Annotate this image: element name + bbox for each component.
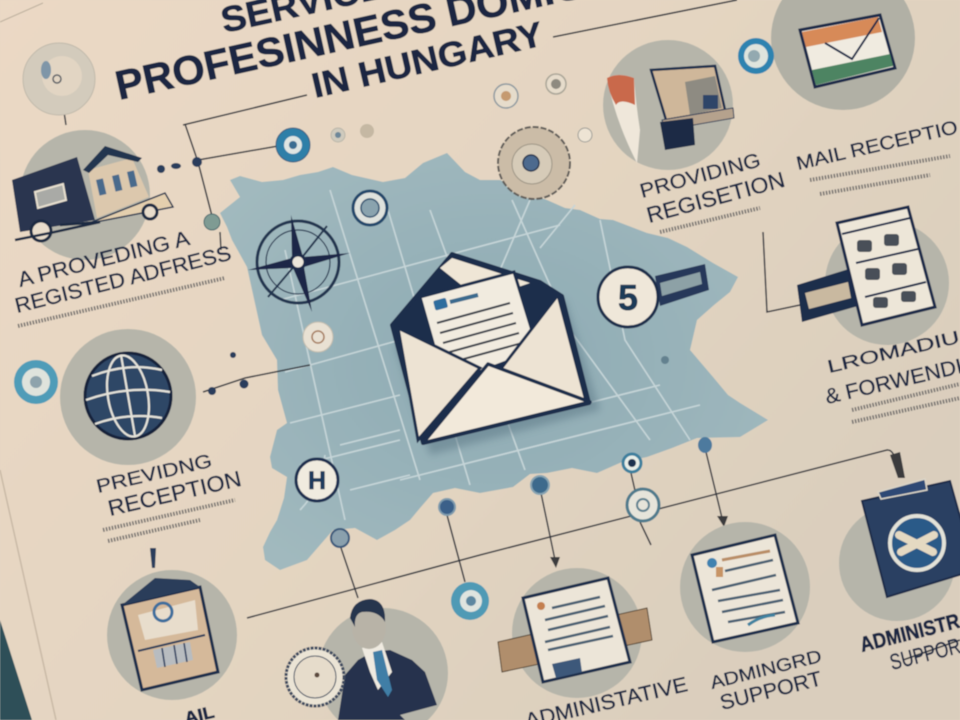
icon: globe <box>60 329 196 465</box>
badge: blue top <box>276 128 310 162</box>
icon: flag envelope <box>771 0 915 110</box>
small dots above map <box>331 74 592 142</box>
label: administrative support centre: ADMINGRD <box>708 646 824 693</box>
head <box>352 607 386 649</box>
badge: teal left <box>14 360 58 404</box>
page edge and dark corner <box>0 3 56 720</box>
tablet <box>837 207 935 325</box>
red pin <box>607 75 640 163</box>
label: providing reception: PREVIDNG <box>94 451 214 498</box>
envelope shadow <box>395 300 600 455</box>
icon: pin and registration box <box>603 40 734 170</box>
badge: letter H: H <box>308 467 326 495</box>
title: IN HUNGARY <box>308 15 547 106</box>
suit <box>338 650 437 720</box>
icon: navy clipboard <box>839 479 960 621</box>
map pins at bottom <box>331 356 712 547</box>
label: providing reception <box>94 451 244 541</box>
badge: letter H <box>296 459 338 501</box>
label: administrative support centre: SUPPORT <box>718 667 824 715</box>
badge: bottom teal <box>451 582 489 620</box>
icon: tablet with small case <box>797 207 949 345</box>
icon: envelope <box>392 254 600 455</box>
label: forwarding: & FORWENDI <box>823 355 960 409</box>
truck box <box>12 157 95 232</box>
small connector dots <box>150 157 248 568</box>
icon: document <box>680 522 810 652</box>
label: administrative support right <box>858 610 960 675</box>
arrowheads <box>550 452 905 568</box>
truck cab <box>92 193 173 222</box>
label: registered address: REGISTED ADFRESS <box>13 242 234 318</box>
badge: target <box>498 127 570 199</box>
badge: map pin D <box>353 191 387 225</box>
map road grid <box>280 190 700 520</box>
map of Hungary <box>220 153 768 570</box>
label: forwarding: LROMADIU <box>825 327 960 377</box>
label: registered address: A PROVEDING A <box>16 227 192 292</box>
icon: document with folder <box>498 568 652 698</box>
icon: compass <box>248 215 350 312</box>
icon: businessman <box>318 599 448 720</box>
icon: truck and house <box>12 130 173 260</box>
badge: bottom centre <box>627 489 659 521</box>
label: mail reception <box>794 117 960 194</box>
small case <box>797 268 858 322</box>
label: mail reception: MAIL RECEPTIO <box>794 117 960 175</box>
label: administrative support centre <box>708 646 824 715</box>
box <box>651 66 725 120</box>
badge: small map circle <box>303 322 333 352</box>
badge: blue near flag <box>738 38 774 74</box>
label: providing registration <box>638 149 787 232</box>
pin: green left of map <box>204 214 220 230</box>
letter <box>420 272 538 385</box>
label: providing reception: RECEPTION <box>106 466 244 521</box>
wheels <box>31 221 51 241</box>
badge: round seal <box>286 648 344 706</box>
label: providing registration: PROVIDING <box>638 149 763 203</box>
badge: number 5: 5 <box>618 277 638 318</box>
icon: parcel box <box>107 570 237 700</box>
envelope back <box>392 254 589 443</box>
label: forwarding <box>823 327 960 422</box>
house <box>88 158 149 218</box>
envelope front <box>398 328 480 440</box>
icon: faded seal top left <box>23 43 95 115</box>
label: providing registration: REGISETION <box>644 167 787 228</box>
badge: number 5 <box>598 264 709 327</box>
